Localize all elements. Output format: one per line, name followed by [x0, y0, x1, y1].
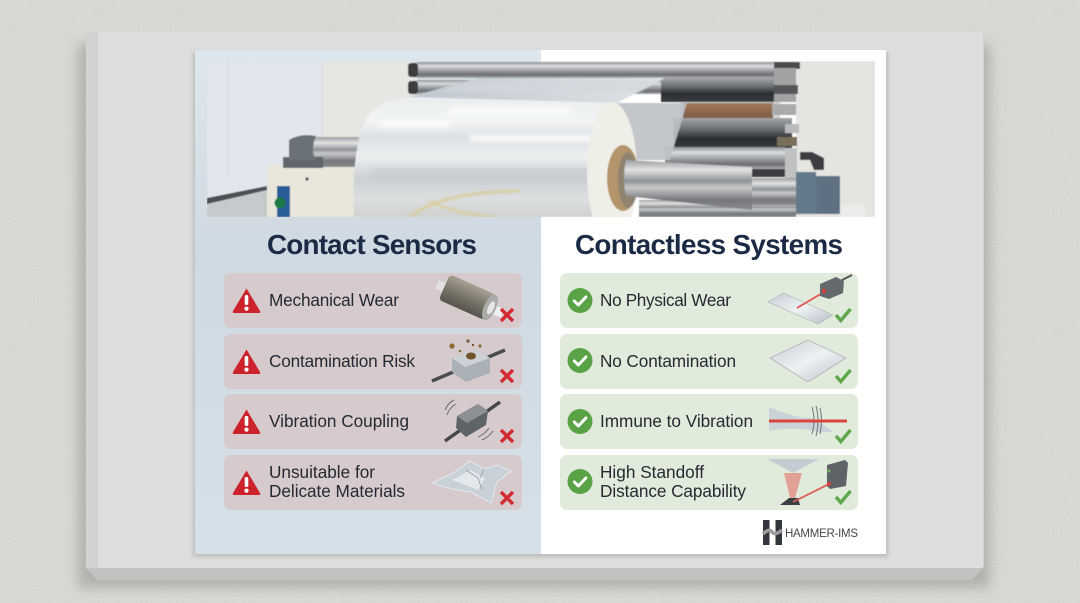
logo: HAMMER-IMS	[763, 520, 858, 545]
icon: green check circle	[568, 288, 592, 313]
logo wordmark: HAMMER-IMS	[785, 528, 858, 540]
label: High Standoff Distance Capability: High Standoff	[600, 462, 704, 482]
card: No Physical Wear	[560, 273, 858, 328]
icon: contaminated sensor	[432, 339, 505, 382]
icon: green tick	[836, 370, 850, 382]
infographic poster	[193, 50, 888, 557]
card: Immune to Vibration	[560, 394, 858, 449]
panel: contactless systems background	[541, 50, 886, 554]
card: Contamination Risk	[224, 334, 522, 389]
label: Mechanical Wear: Mechanical Wear	[269, 290, 399, 310]
icon: red cross	[501, 370, 513, 382]
icon: wrinkled film	[432, 461, 511, 503]
card: High Standoff Distance Capability	[560, 455, 858, 510]
label: Unsuitable for Delicate Materials: Unsuitable for	[269, 462, 375, 482]
icon: standoff laser sensor	[767, 459, 848, 505]
icon: green check circle	[568, 409, 592, 434]
icon: green tick	[836, 430, 850, 442]
icon: laser through vibrating film	[769, 406, 847, 436]
icon: red cross	[501, 492, 513, 504]
logo mark	[763, 520, 782, 545]
icon: green check circle	[568, 348, 592, 373]
label: Immune to Vibration: Immune to Vibration	[600, 411, 753, 431]
icon: worn roller	[431, 271, 508, 326]
card: Unsuitable for Delicate Materials	[224, 455, 522, 510]
label: Contamination Risk: Contamination Risk	[269, 351, 415, 371]
icon: warning triangle	[233, 350, 260, 374]
icon: warning triangle	[233, 410, 260, 434]
heading: Contact Sensors: Contact Sensors	[267, 229, 477, 260]
icon: laser sensor over film	[768, 275, 852, 324]
wall-mounted board	[78, 32, 990, 588]
icon: vibrating sensor	[445, 400, 500, 441]
icon: green check circle	[568, 469, 592, 494]
icon: red cross	[501, 430, 513, 442]
label: No Physical Wear: No Physical Wear	[600, 290, 731, 310]
icon: warning triangle	[233, 288, 260, 313]
machine photo: film roll on rollers	[207, 61, 875, 217]
icon: green tick	[836, 309, 850, 320]
label: Vibration Coupling: Vibration Coupling	[269, 411, 409, 431]
card: No Contamination	[560, 334, 858, 389]
label: No Contamination: No Contamination	[600, 351, 736, 371]
label: Unsuitable for Delicate Materials: Delicate Materials	[269, 481, 405, 501]
panel: contact sensors background	[195, 50, 541, 554]
icon: green tick	[836, 491, 850, 502]
card: Mechanical Wear	[224, 271, 522, 328]
icon: red cross	[501, 309, 513, 321]
label: High Standoff Distance Capability: Distance Capability	[600, 481, 746, 501]
icon: warning triangle	[233, 470, 260, 495]
icon: clean film sheet	[770, 340, 846, 382]
heading: Contactless Systems: Contactless Systems	[575, 229, 843, 260]
card: Vibration Coupling	[224, 394, 522, 449]
